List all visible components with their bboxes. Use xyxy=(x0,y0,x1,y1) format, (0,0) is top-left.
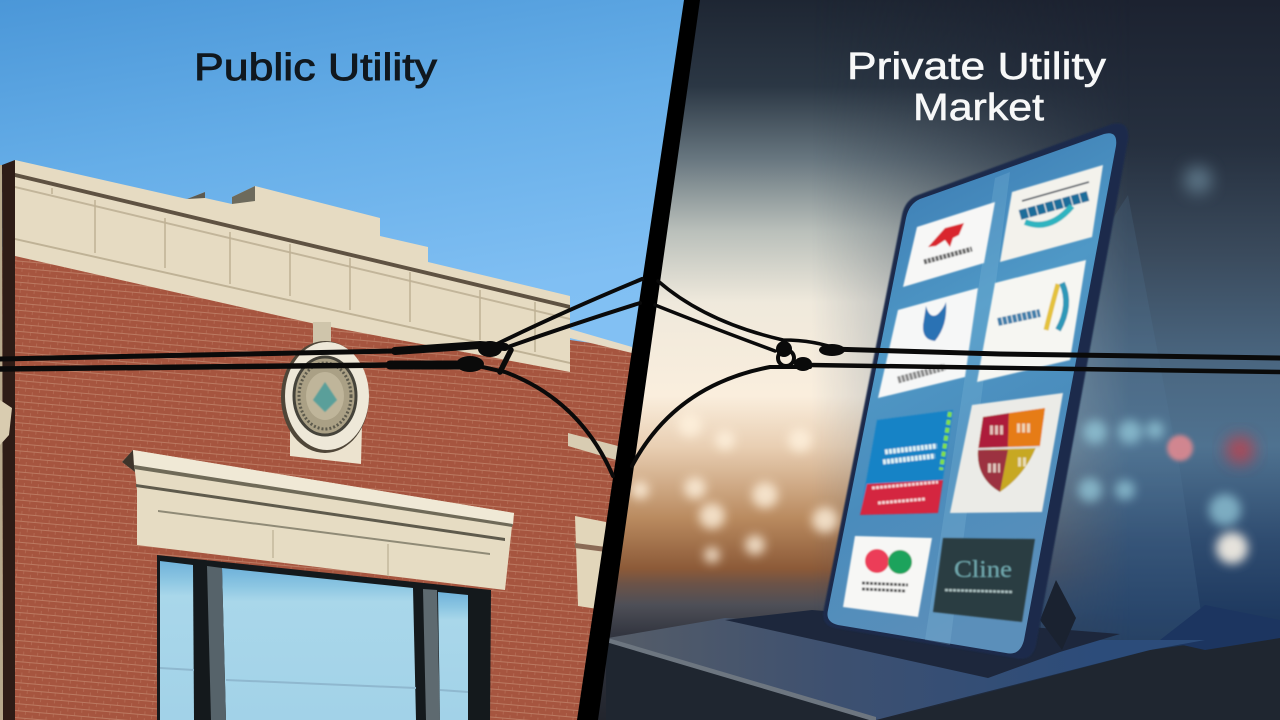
heading: private utility market: Private Utility xyxy=(847,46,1106,88)
tile: red logo xyxy=(903,202,995,287)
tile: red and green circles xyxy=(843,536,932,617)
cables joining both sides xyxy=(0,279,1280,476)
heading: private utility market xyxy=(850,51,1106,121)
right parapet xyxy=(570,329,632,353)
heading: private utility market: Market xyxy=(913,87,1044,129)
stone cornice xyxy=(15,160,570,372)
blurred background xyxy=(560,0,1280,720)
tablet xyxy=(823,123,1128,659)
official seal xyxy=(281,322,369,464)
diagonal divider xyxy=(577,0,700,720)
side stone ledges xyxy=(568,433,618,460)
window lintel xyxy=(122,450,514,590)
tile: blue and red poster xyxy=(860,410,953,515)
tile: teal yellow logo xyxy=(977,260,1086,382)
tile: dark logo: Cline xyxy=(954,557,1012,583)
tile: blue shield logo xyxy=(878,288,978,398)
panel: public utility xyxy=(0,0,700,720)
tile: heraldic shield xyxy=(950,393,1063,513)
tile: dark logo xyxy=(933,538,1035,622)
laptop xyxy=(606,580,1280,720)
bokeh lights xyxy=(631,166,1254,564)
panel: private utility market xyxy=(560,0,1280,720)
tile: blue wave logo xyxy=(1000,165,1103,262)
window xyxy=(157,555,491,720)
sky xyxy=(0,0,684,349)
heading: public utility: Public Utility xyxy=(194,47,437,89)
brick building xyxy=(0,160,640,720)
